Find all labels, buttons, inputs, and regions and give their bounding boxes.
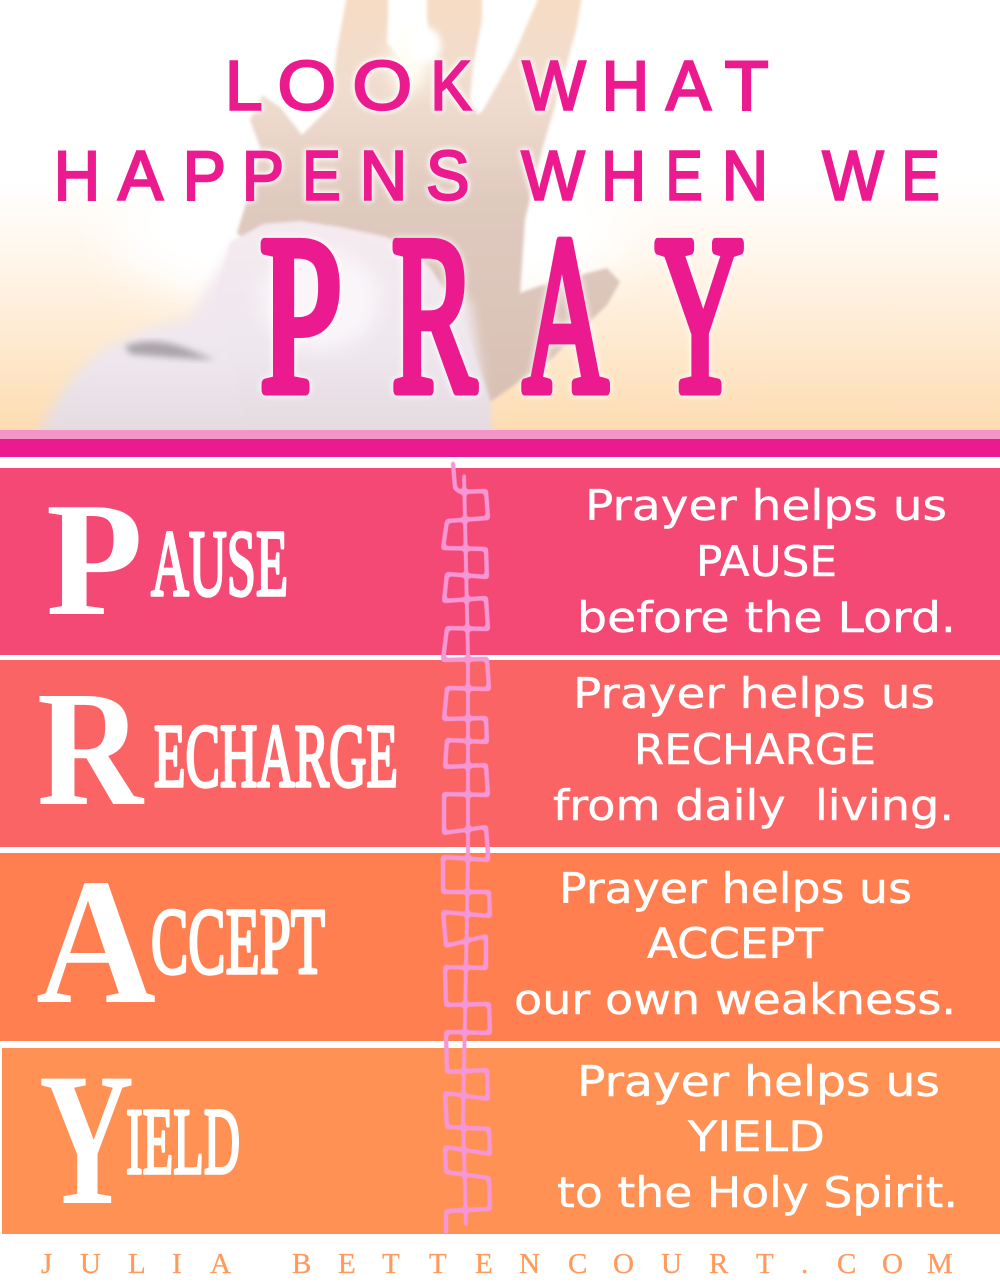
acronym word: Yield: Y [39, 1035, 134, 1245]
title line: HAPPENS WHEN WE: N [360, 136, 407, 214]
footer: website: JULIA BETTENCOURT.COM [41, 1248, 953, 1280]
description: Accept: ACCEPT [647, 919, 823, 968]
title line: LOOK WHAT: W [522, 46, 586, 124]
description: Yield: YIELD [687, 1112, 825, 1161]
description: Pause: PAUSE [696, 537, 837, 586]
description: Recharge [553, 669, 954, 830]
acronym word: Yield: IELD [126, 1090, 240, 1194]
decorative spiral divider [443, 463, 490, 1233]
title line: HAPPENS WHEN WE: E [302, 136, 341, 214]
title word: PRAY: R [392, 191, 476, 439]
panel: Pause [0, 468, 1000, 655]
description: Accept [514, 864, 956, 1024]
title line: HAPPENS WHEN WE: A [118, 136, 163, 214]
title line: HAPPENS WHEN WE: W [822, 136, 884, 214]
title line: HAPPENS WHEN WE: S [426, 136, 470, 214]
panel: Accept [0, 842, 1000, 1041]
title [54, 46, 940, 439]
acronym word: Pause: P [46, 470, 143, 650]
description: Pause [577, 481, 956, 642]
title line: HAPPENS WHEN WE [54, 136, 940, 214]
description: Yield: Prayer helps us [577, 1057, 940, 1106]
title word: PRAY: Y [656, 191, 744, 439]
title word: PRAY: P [260, 191, 342, 439]
title line: LOOK WHAT: T [725, 46, 769, 124]
title line: HAPPENS WHEN WE: H [601, 136, 646, 214]
title line: LOOK WHAT: O [352, 46, 412, 124]
acronym word: Pause: AUSE [151, 512, 288, 616]
acronym word: Pause [46, 470, 288, 650]
title line: LOOK WHAT: O [278, 46, 336, 124]
description: Recharge: from daily living. [553, 781, 954, 830]
header stripes [0, 430, 1000, 457]
title line: HAPPENS WHEN WE: P [183, 136, 226, 214]
title line: HAPPENS WHEN WE: E [901, 136, 940, 214]
acronym word: Recharge [37, 657, 398, 840]
description: Accept: our own weakness. [514, 975, 956, 1024]
description: Pause: Prayer helps us [585, 481, 947, 530]
panel: Yield [2, 1035, 1000, 1245]
description: Pause: before the Lord. [577, 593, 956, 642]
title line: LOOK WHAT [225, 46, 769, 124]
title line: HAPPENS WHEN WE: P [242, 136, 284, 214]
title line: LOOK WHAT: H [602, 46, 649, 124]
title line: LOOK WHAT: L [225, 46, 262, 124]
acronym word: Yield [39, 1035, 240, 1245]
description: Yield: to the Holy Spirit. [557, 1168, 958, 1217]
title word: PRAY [260, 191, 744, 439]
description: Accept: Prayer helps us [559, 864, 912, 913]
acronym word: Accept: CCEPT [151, 890, 325, 994]
panel: Recharge [0, 657, 1000, 847]
acronym word: Recharge: R [37, 657, 145, 840]
acronym word: Recharge: ECHARGE [154, 707, 398, 806]
title line: LOOK WHAT: A [666, 46, 711, 124]
title line: HAPPENS WHEN WE: E [666, 136, 703, 214]
title line: LOOK WHAT: K [430, 46, 471, 124]
title line: HAPPENS WHEN WE: H [54, 136, 100, 214]
title word: PRAY: A [523, 191, 608, 439]
description: Recharge: RECHARGE [634, 725, 876, 774]
title line: HAPPENS WHEN WE: N [722, 136, 768, 214]
description: Yield [557, 1057, 958, 1217]
description: Recharge: Prayer helps us [573, 669, 935, 718]
acronym word: Accept: A [36, 842, 156, 1041]
title line: HAPPENS WHEN WE: W [521, 136, 585, 214]
acronym word: Accept [36, 842, 325, 1041]
hero photo: hand reaching to the sun [0, 0, 1000, 440]
